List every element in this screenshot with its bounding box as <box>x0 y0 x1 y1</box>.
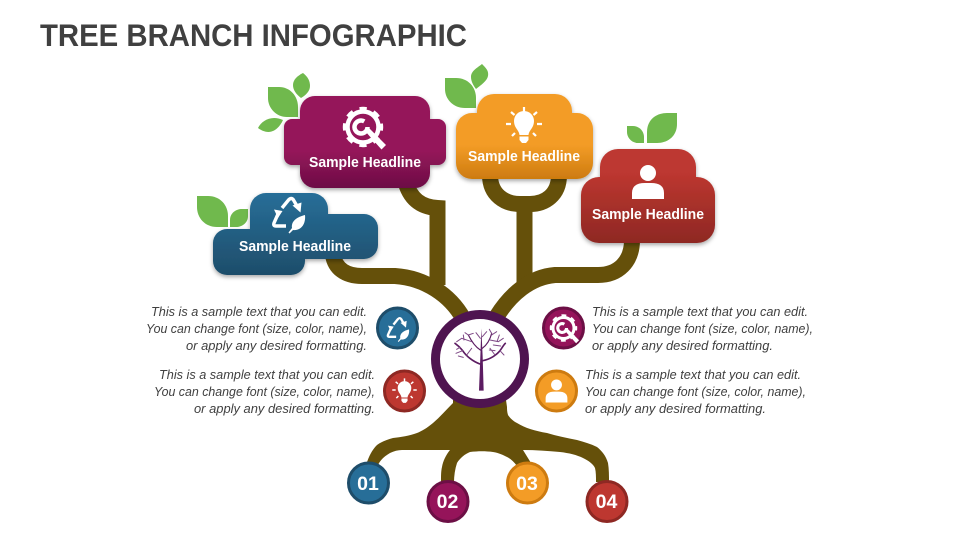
number badge 01 <box>348 463 388 503</box>
number badge 02: 02 <box>437 491 458 513</box>
number badge 03: 03 <box>516 473 538 495</box>
leaves: blue card <box>197 196 248 227</box>
icon badge: gear <box>544 308 584 348</box>
headline: purple: Sample Headline <box>309 155 421 171</box>
icon: bare tree <box>455 328 505 391</box>
text block: upper right <box>592 305 813 353</box>
text block: upper left: This is a sample text that you can edit. <box>151 305 367 319</box>
headline: orange: Sample Headline <box>468 149 580 165</box>
text block: lower left: You can change font (size, color, name), <box>154 385 375 399</box>
text block: lower left: This is a sample text that you can edit. <box>159 368 375 382</box>
leaves: red card <box>627 113 677 143</box>
card: blue headline <box>213 193 378 275</box>
text block: lower right <box>585 368 806 416</box>
number badge 04 <box>587 482 627 522</box>
text block: upper right: You can change font (size, color, name), <box>592 322 813 336</box>
headline: red: Sample Headline <box>592 207 704 223</box>
text block: upper right: This is a sample text that you can edit. <box>592 305 808 319</box>
tree branches <box>333 175 632 318</box>
central circle with tree <box>436 314 524 404</box>
text block: upper left: You can change font (size, color, name), <box>146 322 367 336</box>
icon badge: bulb <box>384 371 424 411</box>
icon: recycle with leaf <box>274 198 305 234</box>
card: orange headline <box>456 94 593 179</box>
number badge 04: 04 <box>596 491 617 513</box>
icon: gear and wrench <box>345 109 386 150</box>
number badge 02 <box>428 482 468 522</box>
icon: light bulb <box>506 107 542 143</box>
card: red headline <box>581 149 715 243</box>
headline: blue: Sample Headline <box>239 239 351 255</box>
number badge 01: 01 <box>357 473 379 495</box>
text block: lower right: You can change font (size, color, name), <box>585 385 806 399</box>
number badge 03 <box>508 463 548 503</box>
tree roots <box>366 400 609 482</box>
text block: upper right: or apply any desired formatting. <box>592 339 773 353</box>
card: purple headline <box>284 96 446 188</box>
text block: lower left: or apply any desired formatting. <box>194 402 375 416</box>
icon: person <box>632 165 664 199</box>
leaves: orange card <box>445 64 488 108</box>
text block: upper left: or apply any desired formatting. <box>186 339 367 353</box>
icon badge: person <box>536 371 576 411</box>
text block: lower right: or apply any desired formatting. <box>585 402 766 416</box>
title: TREE BRANCH INFOGRAPHIC <box>40 17 467 53</box>
text block: lower left <box>154 368 375 416</box>
text block: upper left <box>146 305 367 353</box>
leaves: purple card <box>258 73 310 132</box>
text block: lower right: This is a sample text that you can edit. <box>585 368 801 382</box>
icon badge: recycle <box>378 308 418 348</box>
